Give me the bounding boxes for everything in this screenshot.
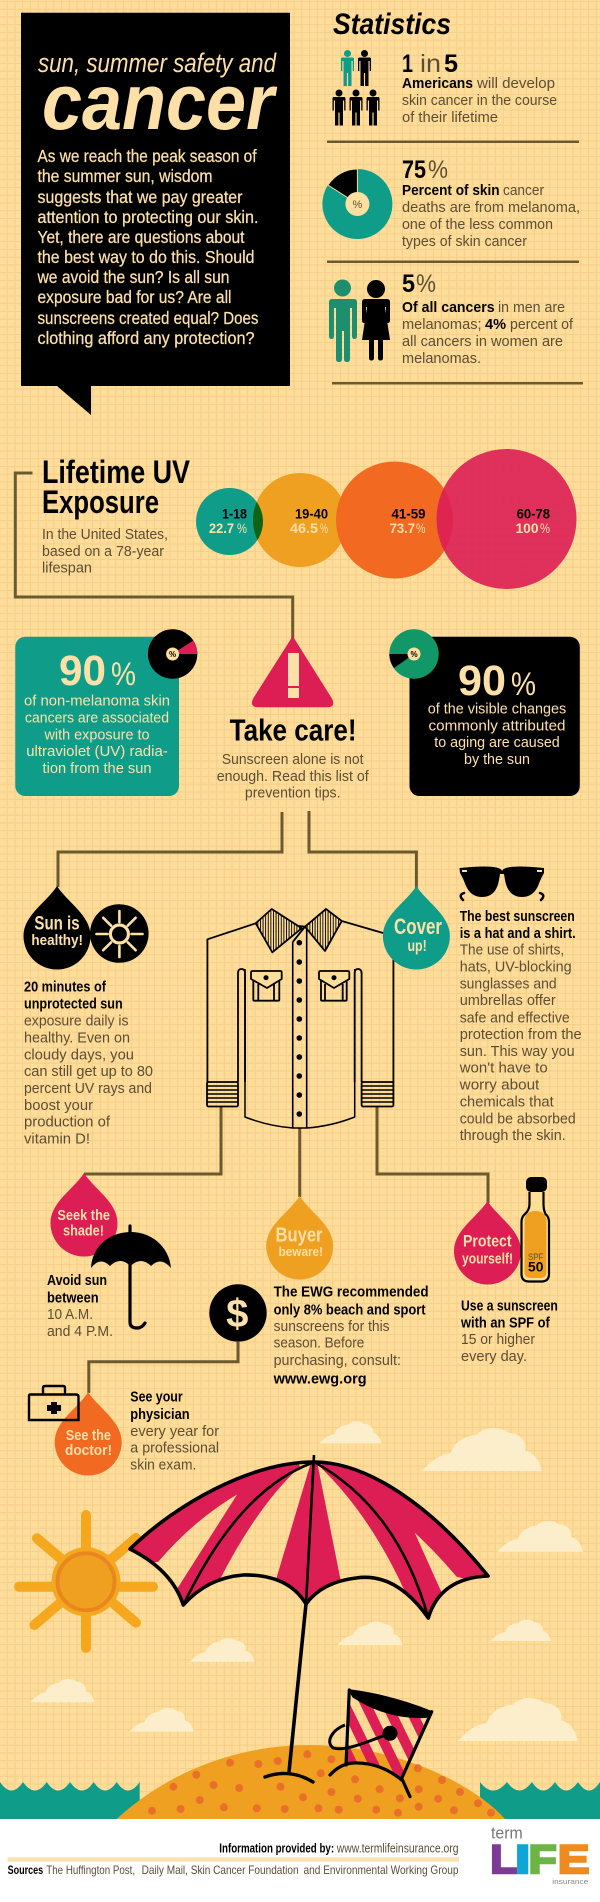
text: exposure daily is [24,1013,128,1030]
circle labels: 1-18 [222,507,247,522]
stat: 5 percent: Of all cancers [402,299,495,316]
big number: % [111,656,136,692]
text: could be absorbed [460,1110,576,1127]
heading: lifetime UV exposure [42,454,191,520]
text: physician [130,1406,190,1423]
chart: small donut red wedge: % [169,650,176,659]
description: enough. Read this list of [217,768,369,785]
stat: 5 percent [402,270,574,367]
stat: 5 percent: in men are [498,299,565,316]
big number [59,647,136,695]
description: to aging are caused [434,734,560,751]
text: unprotected sun [24,996,123,1013]
text: safe and effective [460,1009,570,1026]
text: sunscreens for this [274,1318,390,1335]
sources [8,1863,459,1877]
icon: black drop [24,886,90,970]
footer [0,1819,600,1902]
text: 15 or higher [461,1331,535,1348]
icon: teal drop [383,886,450,970]
text: skin exam. [130,1456,196,1473]
logo: term life insurance: term [491,1823,523,1842]
drop label: Buyer [276,1225,323,1247]
drop label: Cover [394,914,442,939]
text [460,1298,558,1365]
drop label [65,1427,112,1459]
drop label [276,1225,323,1259]
tip: buyer beware [209,1196,429,1387]
icon: striped bucket [330,1690,432,1797]
tip: protect yourself [454,1177,558,1365]
stat: 75 percent: deaths are from melanoma, [402,199,580,216]
drop label: yourself! [462,1250,513,1267]
sources: The Huffington Post, [46,1863,135,1877]
tip: see the doctor [29,1386,219,1476]
text: The EWG recommended [274,1284,429,1301]
circle labels: 22.7 [209,521,234,536]
stat: 75 percent: one of the less common [402,216,553,233]
heading: take care: Take care! [230,713,357,748]
big number [458,657,536,705]
drop label: up! [408,938,427,955]
drop label: beware! [279,1244,323,1259]
logo: term life insurance: F [529,1838,557,1882]
text: vitamin D! [24,1130,90,1147]
intro text: the best way to do this. Should [38,247,254,267]
drop label: Sun is [34,913,80,934]
description: lifespan [42,560,92,577]
text: only 8% beach and sport [274,1301,426,1318]
sand mound [117,1745,505,1819]
text: Avoid sun [47,1272,107,1289]
description: In the United States, [42,526,168,543]
icon: crimson drop [454,1201,521,1284]
heading: statistics: Statistics [333,8,451,41]
credit line: Information provided by: [219,1842,334,1856]
text: www.ewg.org [273,1370,367,1387]
text [273,1284,429,1387]
text [130,1389,219,1473]
sources: and Environmental Working Group [304,1863,459,1877]
stat: 5 percent: melanomas; [402,316,482,333]
icon: big sun [19,1515,153,1648]
text: hats, UV-blocking [460,959,572,976]
text: cloudy days, you [24,1046,134,1063]
drop label: healthy! [31,932,83,949]
tip: cover up [383,867,582,1144]
drop label: doctor! [65,1442,112,1459]
circle labels [209,507,550,536]
text: sunglasses and [460,975,557,992]
chart: overlapping age circles [196,449,576,589]
tip: seek the shade [47,1173,171,1340]
clouds [30,1421,583,1741]
icon: medical bag [29,1386,78,1420]
icon: dollar coin [209,1284,267,1342]
credit line [219,1842,459,1856]
stat: 1 in 5: Americans [402,75,473,92]
heading: lifetime UV exposure: Lifetime UV [42,454,191,490]
text: purchasing, consult: [274,1352,401,1369]
connector: lifetime heading to warning [15,473,293,640]
text: season. Before [274,1335,364,1352]
circle labels: % [540,521,550,536]
tip: sun is healthy [24,886,153,1147]
text: can still get up to 80 [24,1063,153,1080]
stat: 5 percent: % [416,270,436,298]
intro text: suggests that we pay greater [38,187,243,207]
drop label [462,1232,513,1267]
stat: 1 in 5: skin cancer in the course [402,92,557,109]
text: healthy. Even on [24,1030,130,1047]
drop label: shade! [63,1222,104,1239]
text: with an SPF of [460,1315,551,1332]
icon: one in five people [332,50,380,126]
big number: 90 [458,657,506,705]
stat: 1 in 5: of their lifetime [402,109,498,126]
icon: warning triangle [252,637,333,707]
title: cancer [42,57,278,146]
text: every year for [130,1423,219,1440]
big number: 90 [59,647,106,695]
chart: 75 percent donut [322,169,392,239]
intro text: clothing afford any protection? [38,328,255,348]
stat: 1 in 5: 1 [402,50,413,78]
circle labels: 41-59 [392,507,426,522]
circle labels: 100 [516,521,538,536]
intro text: attention to protecting our skin. [38,207,258,227]
stat: 5 percent: all cancers in women are [402,333,563,350]
scene: beach [0,1421,600,1819]
text: 20 minutes of [24,979,107,996]
text: sun. This way you [460,1043,575,1060]
logo: term life insurance: L [490,1838,517,1882]
panel: lifetime UV exposure [42,449,576,589]
panel: intro speech bubble [21,13,290,415]
text: umbrellas offer [460,992,556,1009]
intro text: sunscreens created equal? Does [38,308,259,328]
shirt buttons [296,940,302,1117]
stat: 1 in 5: 5 [444,50,458,78]
drop label [31,913,83,949]
icon: sunglasses [460,867,544,900]
drop label [57,1207,110,1239]
description: ultraviolet (UV) radia- [26,743,168,760]
stat: 5 percent: percent of [510,316,574,333]
logo: term life insurance: I [515,1838,530,1882]
panel: 90 percent aging [389,629,580,796]
text: production of [24,1114,111,1131]
circle labels: 60-78 [517,507,550,522]
intro text: we avoid the sun? Is all sun [37,267,229,287]
icon: orange drop [55,1392,122,1476]
stat: 1 in 5 [402,50,557,126]
icon: man and woman [329,280,390,362]
description [428,700,566,768]
panel: 90 percent non-melanoma [15,629,197,796]
panel: statistics [322,8,583,384]
icon: dollar coin: $ [226,1292,248,1336]
description: of non-melanoma skin [24,693,170,710]
stat: 5 percent: melanomas. [402,350,481,367]
icon: sun in circle [90,904,149,963]
text [459,908,582,1144]
icon: umbrella [91,1226,171,1328]
subtitle: sun, summer safety and [38,48,277,78]
description: Sunscreen alone is not [222,751,364,768]
icon: crimson drop [50,1173,118,1256]
stat: 1 in 5: in [420,50,441,78]
circle labels: 19-40 [295,507,328,522]
description [42,526,168,577]
intro text [37,146,259,348]
text: percent UV rays and [24,1080,152,1097]
circle labels: % [320,521,328,536]
intro text: the summer sun, wisdom [38,166,212,186]
chart: small donut black wedge: % [410,650,418,659]
text: won't have to [459,1060,548,1077]
text: The use of shirts, [460,942,564,959]
intro text: Yet, there are questions about [38,227,245,247]
stat: 1 in 5: will develop [476,75,555,92]
description: cancers are associated [25,710,169,727]
drop label: See the [66,1427,111,1444]
intro text: As we reach the peak season of [38,146,257,166]
connectors: tips tree [58,811,488,1393]
sources: Daily Mail, Skin Cancer Foundation [142,1863,299,1877]
heading: lifetime UV exposure: Exposure [42,484,159,520]
drop label: Seek the [57,1207,110,1224]
description: with exposure to [44,727,150,744]
sea [0,1782,600,1819]
description: prevention tips. [245,785,341,802]
circle labels: 46.5 [290,521,319,536]
circle labels: % [237,521,247,536]
icon: beach umbrella [128,1454,490,1784]
drop label [394,914,442,955]
text: is a hat and a shirt. [460,925,576,942]
text: 10 A.M. [47,1306,93,1323]
text [24,979,153,1147]
sand dots [148,1750,495,1817]
description: based on a 78-year [42,543,164,560]
stat: 5 percent: 4% [485,316,506,333]
text: between [47,1289,99,1306]
stat: 75 percent: types of skin cancer [402,233,527,250]
icon: shirt [207,909,393,1128]
text: See your [130,1389,183,1406]
text: protection from the [460,1026,582,1043]
text: through the skin. [460,1127,566,1144]
icon: sunscreen bottle [522,1177,549,1282]
stat: 75 percent: 75 [402,156,426,184]
description [217,751,369,802]
circle labels: % [416,521,426,536]
logo: term life insurance: E [558,1838,589,1882]
stat: 75 percent [402,156,580,250]
stat: 5 percent: 5 [402,270,415,298]
logo: term life insurance: insurance [552,1877,588,1886]
text: worry about [459,1077,540,1094]
text [47,1272,113,1340]
icon: sunscreen bottle: SPF [528,1252,544,1262]
big number: % [511,666,536,702]
chart: small donut red wedge [148,629,197,679]
panel: take care [217,637,369,802]
shirt pockets [251,971,349,1001]
description: tion from the sun [42,760,152,777]
text: and 4 P.M. [47,1323,113,1340]
credit line: www.termlifeinsurance.org [336,1842,459,1856]
sources: Sources [8,1863,43,1877]
text: a professional [130,1440,219,1457]
text: Use a sunscreen [461,1298,558,1315]
description: of the visible changes [428,700,566,717]
intro text: exposure bad for us? Are all [38,287,232,307]
text: every day. [461,1348,527,1365]
description: commonly attributed [428,717,566,734]
icon: amber drop [266,1196,333,1280]
description [24,693,170,777]
text: The best sunscreen [460,908,575,925]
text: boost your [24,1097,93,1114]
stat: 75 percent: cancer [503,182,544,199]
description: by the sun [464,751,530,768]
drop label: Protect [463,1232,512,1251]
stat: 75 percent: Percent of skin [402,182,500,199]
chart: 75 percent donut: % [353,199,363,211]
circle labels: 73.7 [390,521,415,536]
chart: small donut black wedge [389,629,439,679]
text: chemicals that [460,1093,555,1110]
icon: sunscreen bottle: 50 [528,1259,544,1275]
stat: 75 percent: % [428,156,448,184]
logo: term life insurance [490,1823,589,1886]
